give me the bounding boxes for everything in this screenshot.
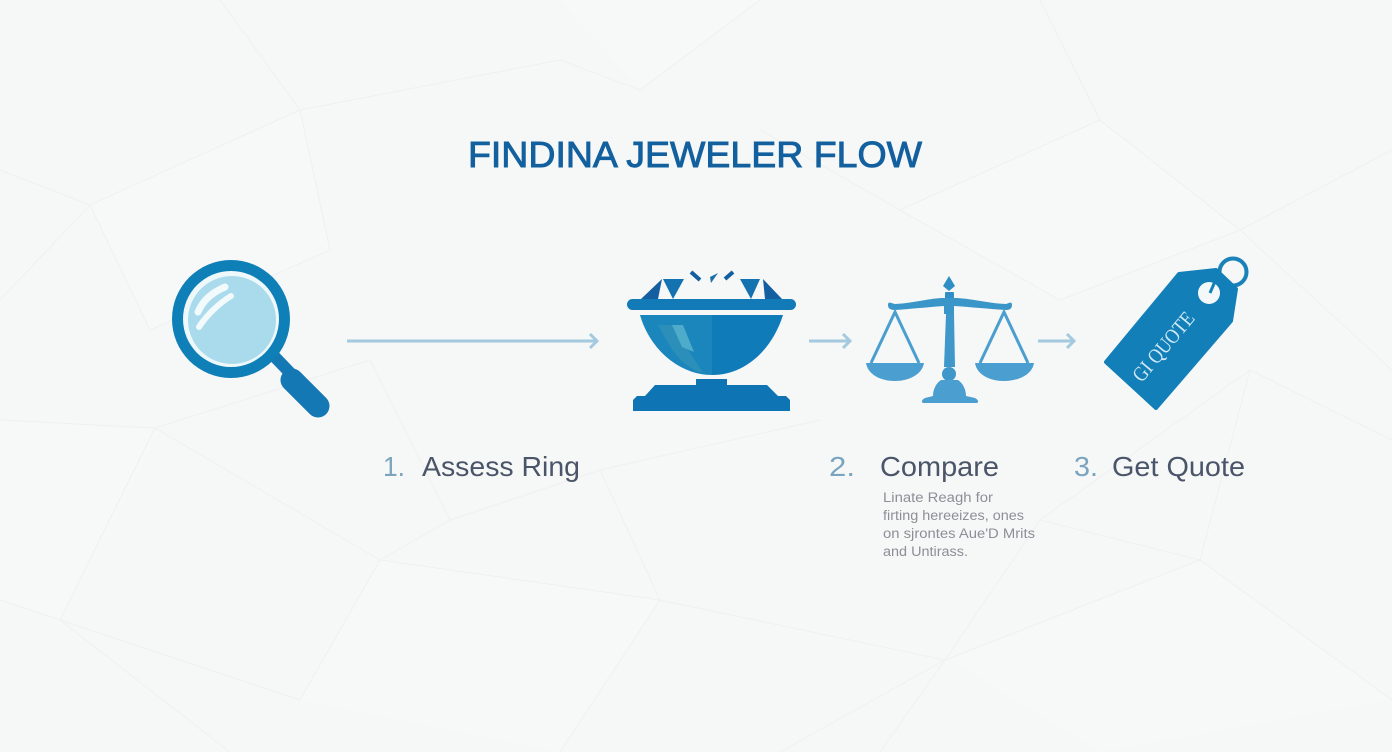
- tag label: GI QUOTE: [1127, 307, 1200, 386]
- step 2 description: and Untirass.: [883, 544, 968, 559]
- step 1 label: Assess Ring: [422, 451, 580, 482]
- arrow: bowl to scale: [809, 334, 850, 348]
- step 2 label: Compare: [880, 451, 999, 482]
- icon: balance scale: [866, 276, 1034, 403]
- icon: magnifying glass: [172, 260, 318, 406]
- icon: jewelry bowl: [627, 272, 796, 411]
- arrow: assess to bowl: [347, 334, 597, 348]
- step 2 description: Linate Reagh for: [883, 490, 994, 505]
- step 3 label: Get Quote: [1112, 451, 1245, 482]
- step 3 label: 3.: [1074, 451, 1098, 482]
- step 1 label: 1.: [383, 451, 405, 482]
- step 2 label: 2.: [829, 451, 855, 482]
- step 2 description: [883, 490, 1035, 559]
- arrow: scale to tag: [1038, 334, 1074, 348]
- step 2 description: firting hereeizes, ones: [883, 508, 1024, 523]
- step 2 description: on sjrontes Aue'D Mrits: [883, 526, 1035, 541]
- icon: price tag: [1106, 258, 1246, 408]
- step 2 label: [829, 451, 999, 482]
- title: FINDINA JEWELER FLOW: [468, 134, 922, 175]
